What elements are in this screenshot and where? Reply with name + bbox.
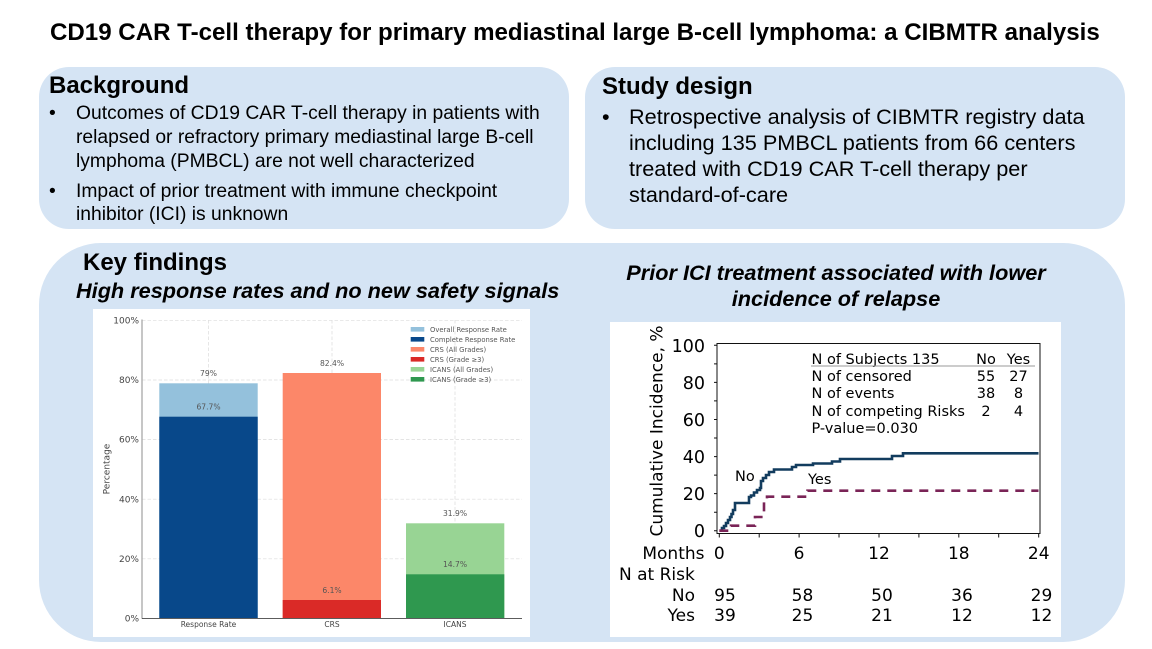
number at risk table xyxy=(619,565,1052,626)
y-axis tick labels: 40 xyxy=(683,448,705,468)
heading: key findings: Key findings xyxy=(83,249,227,276)
curve: prior ICI xyxy=(719,491,1038,531)
x-axis labels xyxy=(181,620,467,629)
y-axis tick labels xyxy=(113,316,139,624)
text block: study design bullet: • xyxy=(602,104,610,129)
legend: CRS (All Grades) xyxy=(430,346,486,354)
panel: study design xyxy=(585,67,1125,229)
summary table: 2 xyxy=(981,404,991,420)
plot frame and ticks xyxy=(714,344,1040,538)
x-axis labels: CRS xyxy=(324,620,340,629)
bars: ICANS xyxy=(406,523,504,618)
text block: background bullet 1: Outcomes of CD19 CAR T-cell therapy in patients with xyxy=(76,103,540,124)
summary table: 8 xyxy=(1014,386,1023,402)
summary table: 38 xyxy=(977,386,995,402)
summary table: 4 xyxy=(1014,404,1023,420)
panel: background xyxy=(39,67,569,229)
text block: study design bullet: Retrospective analysis of CIBMTR registry data xyxy=(629,104,1085,129)
curve label: Yes: Yes xyxy=(807,472,831,488)
curve label: No: No xyxy=(735,469,755,485)
summary table: Yes xyxy=(1006,352,1030,368)
heading: study design: Study design xyxy=(602,73,753,100)
text block: background bullet 2 xyxy=(49,181,497,225)
value labels: 82.4% xyxy=(320,359,344,368)
x-axis labels: ICANS xyxy=(444,620,467,629)
summary table: N of events xyxy=(812,386,894,402)
text block: background bullet 1: • xyxy=(49,103,56,124)
legend: Complete Response Rate xyxy=(430,336,515,344)
value labels xyxy=(196,359,467,595)
y-axis tick labels: 100 xyxy=(672,337,705,357)
bars: CRS xyxy=(283,373,381,618)
number at risk table: 25 xyxy=(792,606,813,626)
summary table xyxy=(811,352,1035,437)
y-axis tick labels: 80% xyxy=(119,376,139,386)
curve: no prior ICI xyxy=(720,453,1038,531)
x-axis labels: Response Rate xyxy=(181,620,237,629)
text block: background bullet 2: Impact of prior treatment with immune checkpoint xyxy=(76,181,497,202)
chart: stacked bar chart of response and toxicity rates xyxy=(93,309,530,637)
number at risk table: 29 xyxy=(1031,586,1052,606)
text block: background bullet 1: lymphoma (PMBCL) are not well characterized xyxy=(76,151,475,172)
chart: cumulative incidence of relapse curve xyxy=(610,322,1061,637)
value labels: 79% xyxy=(200,369,217,378)
value labels: 31.9% xyxy=(443,509,467,518)
number at risk table: 12 xyxy=(1031,606,1052,626)
legend: Overall Response Rate xyxy=(430,326,507,334)
text block: study design bullet: treated with CD19 CAR T-cell therapy per xyxy=(629,156,1028,181)
legend: ICANS (Grade ≥3) xyxy=(430,376,492,384)
summary table: N of Subjects 135 xyxy=(812,352,940,368)
number at risk table: 12 xyxy=(951,606,973,626)
value labels: 67.7% xyxy=(196,402,221,412)
y-axis tick labels: 0 xyxy=(694,522,705,542)
x-axis labels xyxy=(642,544,1050,564)
number at risk table: 95 xyxy=(714,586,736,606)
number at risk table: N at Risk xyxy=(619,565,695,585)
x-axis labels: Months xyxy=(642,544,705,564)
text block: background bullet 1 xyxy=(49,103,540,172)
summary table: N of censored xyxy=(812,369,912,385)
y-axis tick labels: 80 xyxy=(683,374,705,394)
y-axis tick labels: 100% xyxy=(113,316,139,326)
legend: ICANS (All Grades) xyxy=(430,366,493,374)
text block: study design bullet xyxy=(602,104,1085,207)
subheading: prior ICI: Prior ICI treatment associated with lower incidence of relapse xyxy=(626,260,1046,311)
number at risk table: 39 xyxy=(714,606,736,626)
y-axis tick labels: 0% xyxy=(125,614,139,624)
number at risk table: No xyxy=(672,586,695,606)
summary table: P-value=0.030 xyxy=(812,421,918,437)
x-axis labels: 6 xyxy=(794,544,805,564)
legend: CRS (Grade ≥3) xyxy=(430,356,484,364)
y-axis title: Cumulative Incidence, % xyxy=(648,325,668,537)
number at risk table: 58 xyxy=(792,586,813,606)
y-axis tick labels xyxy=(672,337,705,542)
y-axis title: Percentage xyxy=(102,443,112,494)
summary table: 55 xyxy=(977,369,995,385)
bars: response rate xyxy=(159,383,258,618)
title: CD19 CAR T-cell therapy for primary mediastinal large B-cell lymphoma: a CIBMTR analysis xyxy=(50,19,1100,46)
x-axis labels: 24 xyxy=(1028,544,1050,564)
text block: background bullet 2: inhibitor (ICI) is unknown xyxy=(76,204,288,225)
text block: background bullet 2: • xyxy=(49,181,56,202)
text block: study design bullet: standard-of-care xyxy=(629,182,788,207)
legend xyxy=(411,326,515,384)
heading: background: Background xyxy=(49,72,189,99)
text block: study design bullet: including 135 PMBCL patients from 66 centers xyxy=(629,130,1075,155)
value labels: 14.7% xyxy=(443,560,467,569)
y-axis tick labels: 20% xyxy=(119,555,139,565)
x-axis labels: 12 xyxy=(868,544,890,564)
y-axis tick labels: 60% xyxy=(119,436,139,446)
subheading: high response rates: High response rates and no new safety signals xyxy=(76,278,559,303)
number at risk table: 50 xyxy=(871,586,893,606)
value labels: 6.1% xyxy=(322,586,342,595)
text block: background bullet 1: relapsed or refractory primary mediastinal large B-cell xyxy=(76,127,534,148)
y-axis tick labels: 60 xyxy=(683,411,705,431)
axes xyxy=(142,320,522,619)
x-axis labels: 0 xyxy=(714,544,725,564)
number at risk table: 21 xyxy=(871,606,893,626)
summary table: N of competing Risks xyxy=(812,404,965,420)
y-axis tick labels: 40% xyxy=(119,495,139,505)
x-axis labels: 18 xyxy=(948,544,970,564)
number at risk table: 36 xyxy=(951,586,973,606)
panel: key findings xyxy=(39,243,1125,642)
number at risk table: Yes xyxy=(667,606,695,626)
y-axis tick labels: 20 xyxy=(683,485,705,505)
summary table: No xyxy=(976,352,996,368)
summary table: 27 xyxy=(1009,369,1028,385)
